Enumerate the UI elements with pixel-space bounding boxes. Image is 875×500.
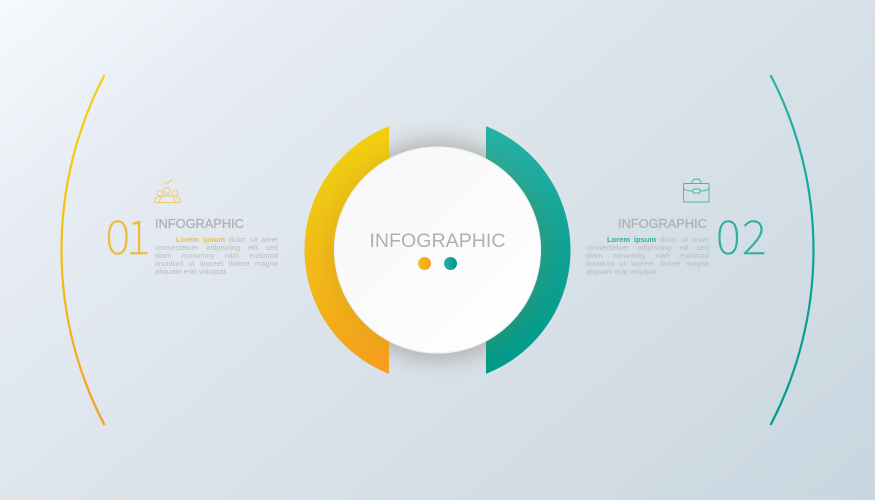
heading: left: INFOGRAPHIC <box>155 216 244 231</box>
text block: left: diam nonummy nibh euismod <box>155 251 278 260</box>
text block: right: aliquam erat volutpat. <box>586 267 659 276</box>
heading: right: INFOGRAPHIC <box>618 216 707 231</box>
graphic: arcs, ring segments, central circle, icons and numbers <box>60 74 815 426</box>
text block: left <box>155 235 278 276</box>
central white circle <box>334 147 540 353</box>
text block: right <box>586 235 709 276</box>
central title: INFOGRAPHIC <box>369 230 506 252</box>
arc: right teal bracket <box>770 75 814 425</box>
text block: right: diam nonummy nibh euismod <box>586 251 709 260</box>
ring segment: left yellow <box>304 126 389 374</box>
icon: people group with check <box>154 180 180 202</box>
icon: briefcase <box>684 179 709 202</box>
arc: left yellow bracket <box>61 75 104 425</box>
text block: right: consectetuer adipiscing elit sed <box>586 243 709 252</box>
shadow on background above and below the circle <box>389 132 486 366</box>
number 02: 02 <box>716 199 768 268</box>
ring segment: right teal <box>486 126 570 374</box>
number 01: 01 <box>106 199 148 268</box>
text block: left: aliquam erat volutpat. <box>155 267 228 276</box>
soft shadow on ring segments <box>330 142 546 358</box>
text block: right: Lorem ipsum dolor sit amet <box>607 235 709 244</box>
text block: left: tincidunt ut laoreet dolore magna <box>155 259 278 268</box>
text block: left: consectetuer adipiscing elit sed <box>155 243 278 252</box>
text block: right: tincidunt ut laoreet dolore magna <box>586 259 709 268</box>
dot: yellow <box>418 257 431 270</box>
dot: teal <box>444 257 457 270</box>
text block: left: Lorem ipsum dolor sit amet <box>176 235 278 244</box>
